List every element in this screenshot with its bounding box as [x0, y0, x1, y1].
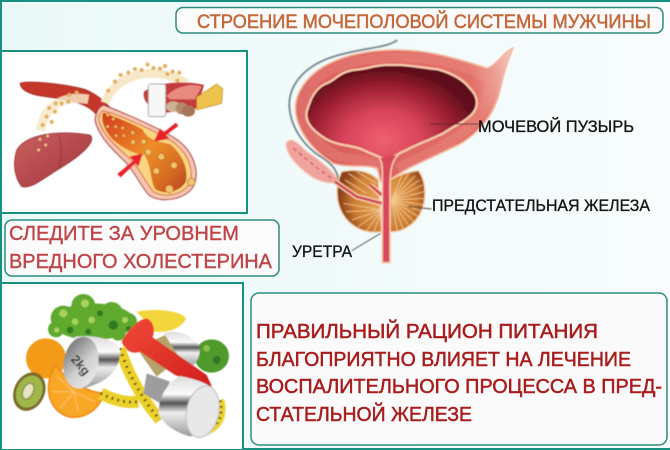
arc of particles from food	[105, 63, 187, 103]
prostate	[337, 170, 425, 232]
artery section with plaque	[95, 105, 196, 200]
food: meat, milk, cheese, mushrooms	[144, 83, 223, 117]
bladder lumen	[306, 65, 477, 162]
callout: watch cholesterol: СЛЕДИТЕ ЗА УРОВНЕМ	[9, 222, 239, 245]
callout: watch cholesterol: ВРЕДНОГО ХОЛЕСТЕРИНА	[9, 250, 272, 273]
leader line: prostate	[408, 207, 432, 209]
label: prostate: ПРЕДСТАТЕЛЬНАЯ ЖЕЛЕЗА	[432, 196, 651, 215]
seminal vesicle	[286, 140, 338, 183]
urethra	[379, 155, 398, 263]
panel: healthy food and dumbbells	[1, 283, 243, 450]
kiwi	[7, 367, 52, 416]
text panel: nutrition advice: ПРАВИЛЬНЫЙ РАЦИОН ПИТАНИЯ	[256, 319, 598, 343]
text panel: nutrition advice	[251, 293, 667, 445]
peritoneum line	[289, 40, 397, 182]
arrow: plaque pressure upper	[154, 123, 178, 142]
text panel: nutrition advice: БЛАГОПРИЯТНО ВЛИЯЕТ НА ЛЕЧЕНИЕ	[256, 348, 631, 371]
leader line: bladder	[430, 122, 478, 125]
orange half	[49, 365, 103, 417]
text panel: nutrition advice: ВОСПАЛИТЕЛЬНОГО ПРОЦЕССА В ПРЕД-	[256, 375, 662, 398]
arrow: plaque pressure lower	[117, 153, 143, 177]
red dumbbell	[122, 318, 212, 387]
front dumbbell left	[59, 334, 120, 391]
diagram: male urogenital anatomy	[286, 40, 651, 263]
front dumbbell right	[143, 373, 224, 440]
orange	[26, 338, 66, 378]
text panel: nutrition advice: СТАТЕЛЬНОЙ ЖЕЛЕЗЕ	[256, 402, 472, 426]
title box: СТРОЕНИЕ МОЧЕПОЛОВОЙ СИСТЕМЫ МУЖЧИНЫ	[197, 9, 651, 33]
artery tail	[20, 82, 111, 115]
callout: watch cholesterol	[5, 220, 279, 276]
panel: cholesterol artery illustration	[1, 51, 247, 213]
bladder wall	[296, 48, 513, 182]
ejaculatory duct	[335, 182, 382, 203]
back dumbbell	[137, 332, 200, 377]
label: bladder: МОЧЕВОЙ ПУЗЫРЬ	[478, 117, 634, 136]
bladder wall striations	[302, 57, 490, 168]
liver	[14, 133, 92, 187]
lettuce	[48, 294, 229, 373]
label: urethra: УРЕТРА	[292, 242, 353, 261]
front dumbbell left: 2kg	[68, 353, 93, 378]
banana	[137, 310, 186, 332]
arc of particles from liver	[41, 91, 88, 131]
leader line: urethra	[352, 233, 381, 251]
tape measure	[101, 348, 221, 434]
duct inner	[335, 182, 382, 203]
